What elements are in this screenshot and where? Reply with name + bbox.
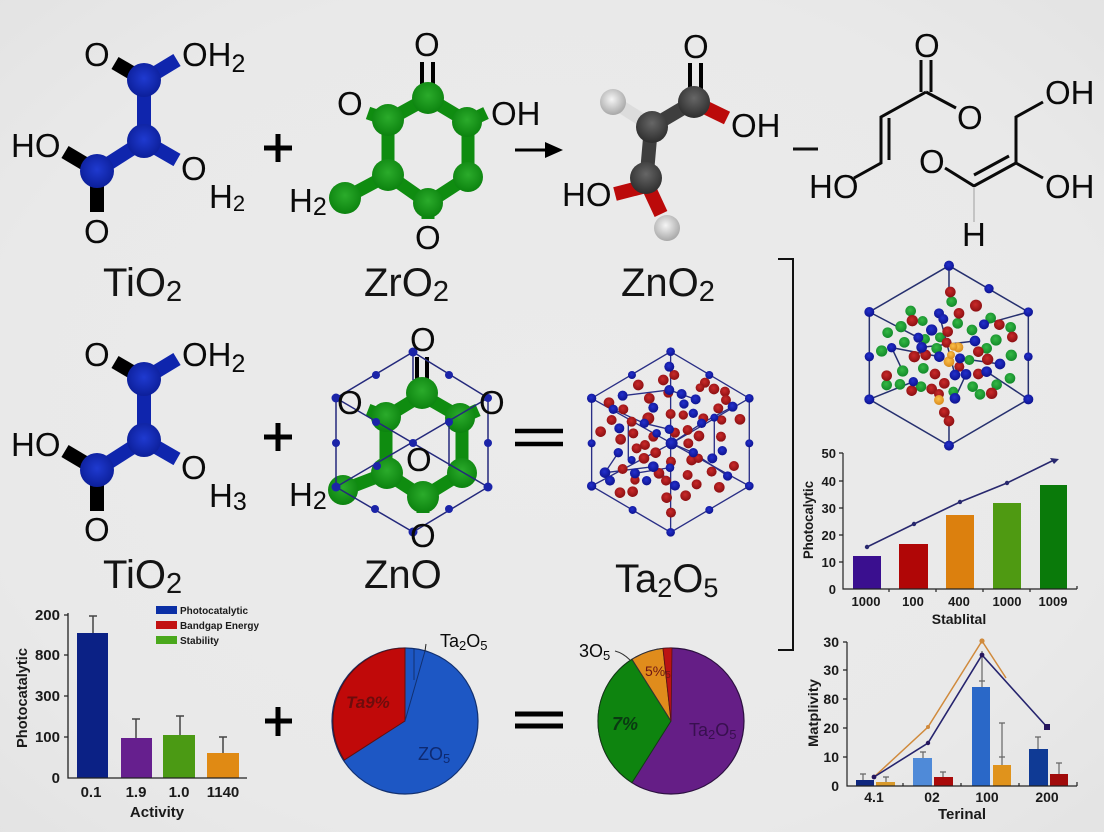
molecule: TiO2 row 1: 2 — [232, 50, 245, 78]
axis labels: 1.9 — [126, 784, 146, 801]
label: TiO2: TiO — [103, 261, 166, 305]
pie chart: left: ZO — [418, 744, 443, 764]
molecule: ZnO in lattice: O — [479, 384, 505, 421]
axis labels: Terinal — [938, 806, 986, 823]
axis labels: 4.1 — [864, 789, 884, 805]
plus sign row 2 — [264, 423, 292, 451]
molecule: skeletal structure: OH — [1045, 74, 1094, 111]
molecule: TiO2 row 1: HO — [11, 127, 60, 164]
molecule: TiO2 row 2: 2 — [232, 350, 245, 378]
equals sign row 3 — [515, 714, 563, 726]
axis labels: 1.0 — [169, 784, 189, 801]
label: Ta2O5: O — [672, 557, 703, 601]
molecule: TiO2 row 1: OH — [182, 36, 232, 73]
molecule: TiO2 row 2: H — [209, 477, 233, 514]
molecule: TiO2 row 1 — [11, 36, 245, 250]
axis labels: 0.1 — [81, 784, 101, 801]
axis labels: 20 — [823, 720, 839, 736]
bar chart: photocatalytic activity — [14, 606, 259, 821]
axis labels: 100 — [902, 594, 924, 609]
axis labels: 1140 — [207, 784, 239, 801]
lines — [872, 638, 1050, 779]
axis labels: 1000 — [852, 594, 880, 609]
axis labels: 40 — [822, 474, 836, 489]
molecule: skeletal structure: HO — [809, 168, 858, 205]
axis labels: 1000 — [993, 594, 1021, 609]
label: TiO2 row 2: 2 — [166, 568, 182, 600]
axis labels — [800, 446, 1067, 627]
axis labels: 300 — [35, 688, 60, 705]
axis labels: 200 — [35, 607, 60, 624]
label: ZrO2: ZrO — [364, 261, 433, 305]
axis labels: 400 — [948, 594, 970, 609]
molecule: TiO2 row 2: O — [84, 336, 110, 373]
molecule: ZrO2 row 1: 2 — [313, 193, 327, 221]
molecule: ZnO in lattice: O — [410, 321, 436, 358]
axis labels: 80 — [823, 691, 839, 707]
pie chart: right: 5 — [729, 727, 736, 742]
plus sign row 3 — [265, 707, 292, 736]
label: Ta2O5: Ta — [615, 557, 657, 601]
axes — [839, 453, 1077, 592]
molecule: ZnO in lattice: 2 — [313, 487, 327, 515]
molecule: TiO2 row 2: OH — [182, 336, 232, 373]
axis labels: 10 — [822, 555, 836, 570]
axis labels: 100 — [975, 789, 999, 805]
pie chart: left: 5 — [443, 751, 450, 766]
pie chart: left: Ta — [440, 631, 459, 651]
molecule: skeletal structure: O — [957, 99, 983, 136]
axis labels: 100 — [35, 729, 60, 746]
pie chart: right — [579, 641, 744, 794]
molecule: ZrO2 row 1: O — [415, 219, 441, 256]
molecule: ZnO in lattice: O — [410, 517, 436, 554]
legend — [156, 606, 259, 647]
molecule: skeletal structure: O — [914, 27, 940, 64]
axis labels: 30 — [822, 501, 836, 516]
error bars — [89, 616, 227, 753]
pie chart: right: O — [715, 720, 729, 740]
axes — [64, 613, 247, 778]
molecule: TiO2 row 1: H — [209, 178, 233, 215]
combo chart: terminal bars and lines — [805, 634, 1077, 823]
axes — [843, 642, 1077, 786]
label: TiO2 row 2: TiO — [103, 553, 166, 597]
legend: Bandgap Energy — [180, 621, 259, 632]
molecule: skeletal structure — [809, 27, 1094, 253]
pie chart: right: 5 — [603, 648, 610, 663]
axis labels: Photocatalytic — [14, 648, 31, 748]
label: ZnO2: 2 — [699, 276, 715, 308]
pie chart: right: Ta — [689, 720, 708, 740]
axis labels: 1009 — [1039, 594, 1067, 609]
label: ZrO2: 2 — [433, 276, 449, 308]
legend: Stability — [180, 636, 219, 647]
combo chart: stability bars and line — [800, 446, 1077, 627]
molecule: ZnO in lattice — [289, 321, 505, 554]
bars — [77, 633, 239, 778]
molecule: TiO2 row 2: O — [84, 511, 110, 548]
pie chart: right: 7% — [612, 714, 638, 734]
crystal lattice: mixed cluster — [864, 261, 1033, 451]
bracket — [778, 259, 793, 650]
axis labels: 30 — [823, 662, 839, 678]
axis labels: 200 — [1035, 789, 1059, 805]
axis labels: 10 — [823, 749, 839, 765]
molecule: TiO2 row 1: O — [181, 150, 207, 187]
axis labels: Matplivity — [805, 679, 821, 747]
crystal lattice: Ta2O5 — [587, 347, 754, 537]
pie chart: left: 5 — [480, 638, 488, 653]
label: TiO2: 2 — [166, 276, 182, 308]
axis labels — [805, 634, 1059, 823]
axis labels: 02 — [924, 789, 940, 805]
axis labels: 20 — [822, 528, 836, 543]
error bars — [860, 651, 1062, 782]
molecule: ZnO2 ball and stick: OH — [731, 107, 780, 144]
label: ZnO: ZnO — [364, 553, 442, 597]
molecule: TiO2 row 2 — [11, 336, 247, 548]
label: Ta2O5: 5 — [703, 573, 718, 603]
molecule: TiO2 row 2: 3 — [233, 488, 247, 516]
molecule: ZrO2 row 1: OH — [491, 95, 540, 132]
equals sign row 2 — [515, 431, 563, 444]
pie chart: left: 2 — [459, 638, 466, 653]
axis labels: Activity — [130, 804, 185, 821]
molecule: ZnO in lattice: O — [337, 384, 363, 421]
molecule: ZrO2 row 1: H — [289, 182, 313, 219]
pie chart: left — [332, 631, 488, 794]
molecule: ZnO2 ball and stick: HO — [562, 176, 612, 213]
axis labels: Photocalytic — [800, 481, 816, 559]
pie chart: right: 5 — [665, 670, 671, 681]
molecule: ZnO2 ball and stick — [562, 28, 780, 241]
bars — [856, 687, 1068, 786]
label: Ta2O5: 2 — [657, 573, 672, 603]
molecule: ZnO in lattice: O — [406, 441, 432, 478]
molecule: TiO2 row 2: HO — [11, 426, 60, 463]
legend: Photocatalytic — [180, 606, 248, 617]
label: ZnO2: ZnO — [621, 261, 699, 305]
pie chart: right: 3O — [579, 641, 603, 661]
axis labels: 0 — [52, 770, 60, 787]
molecule: skeletal structure: O — [919, 143, 945, 180]
trend line — [865, 458, 1059, 549]
molecule: ZnO in lattice: H — [289, 476, 313, 513]
plus sign — [264, 134, 292, 162]
axis labels — [14, 607, 239, 821]
molecule: ZrO2 row 1: O — [337, 85, 363, 122]
molecule: skeletal structure: H — [962, 216, 986, 253]
axis labels: 0 — [829, 582, 836, 597]
pie chart: left: Ta9% — [346, 693, 390, 712]
molecule: TiO2 row 1: 2 — [233, 191, 245, 216]
molecule: ZrO2 row 1 — [289, 26, 540, 256]
pie chart: right: 5% — [645, 663, 665, 679]
molecule: TiO2 row 1: O — [84, 213, 110, 250]
axis labels: 0 — [831, 778, 839, 794]
molecule: ZrO2 row 1: O — [414, 26, 440, 63]
pie chart: left: O — [466, 631, 480, 651]
arrow — [515, 142, 563, 158]
bars — [853, 485, 1067, 589]
axis labels: 30 — [823, 634, 839, 650]
pie chart: right: 2 — [708, 727, 715, 742]
molecule: ZnO2 ball and stick: O — [683, 28, 709, 65]
molecule: TiO2 row 2: O — [181, 449, 207, 486]
axis labels: 800 — [35, 647, 60, 664]
axis labels: Stablital — [932, 611, 986, 627]
axis labels: 50 — [822, 446, 836, 461]
molecule: skeletal structure: OH — [1045, 168, 1094, 205]
minus dash — [793, 148, 818, 150]
molecule: TiO2 row 1: O — [84, 36, 110, 73]
